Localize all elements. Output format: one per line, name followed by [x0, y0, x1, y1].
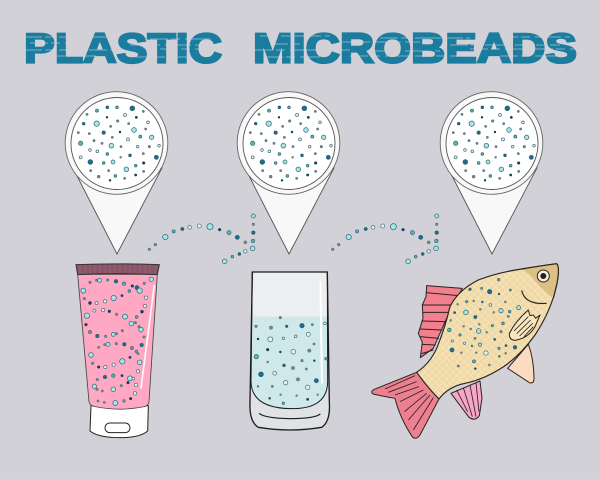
pin 2: [237, 92, 340, 254]
tube: [76, 264, 159, 438]
tube highlight: [141, 285, 154, 388]
beads: [249, 106, 332, 181]
tube body: [78, 274, 157, 409]
title: [24, 24, 577, 72]
glass highlight: [320, 282, 322, 383]
title: MICROBEADS: [253, 24, 577, 72]
beads: [77, 106, 160, 181]
mouth: [522, 290, 547, 303]
belly fin: [508, 344, 534, 383]
tube crimp: [76, 264, 159, 275]
water: [251, 317, 328, 409]
glass body: [250, 272, 329, 430]
glass outline: [250, 272, 329, 430]
eye: [537, 270, 549, 282]
beads: [452, 106, 535, 181]
fish head: [522, 264, 558, 298]
pin 1: [65, 92, 168, 254]
tail fin: [372, 372, 439, 438]
pectoral fin: [509, 310, 540, 340]
title text: PLASTIC: [24, 24, 222, 72]
arrow: glass to fish: [332, 214, 439, 264]
fish: [372, 264, 558, 438]
glass beads: [254, 316, 327, 404]
tube beads: [81, 277, 153, 405]
dorsal fin: [418, 286, 462, 358]
anal fin: [451, 381, 482, 419]
arrow: tube to glass: [148, 214, 255, 264]
fish body: [417, 264, 558, 399]
tube cap: [90, 406, 148, 438]
glass: [250, 272, 329, 430]
pin 3: [440, 92, 543, 254]
fish beads: [447, 278, 521, 369]
